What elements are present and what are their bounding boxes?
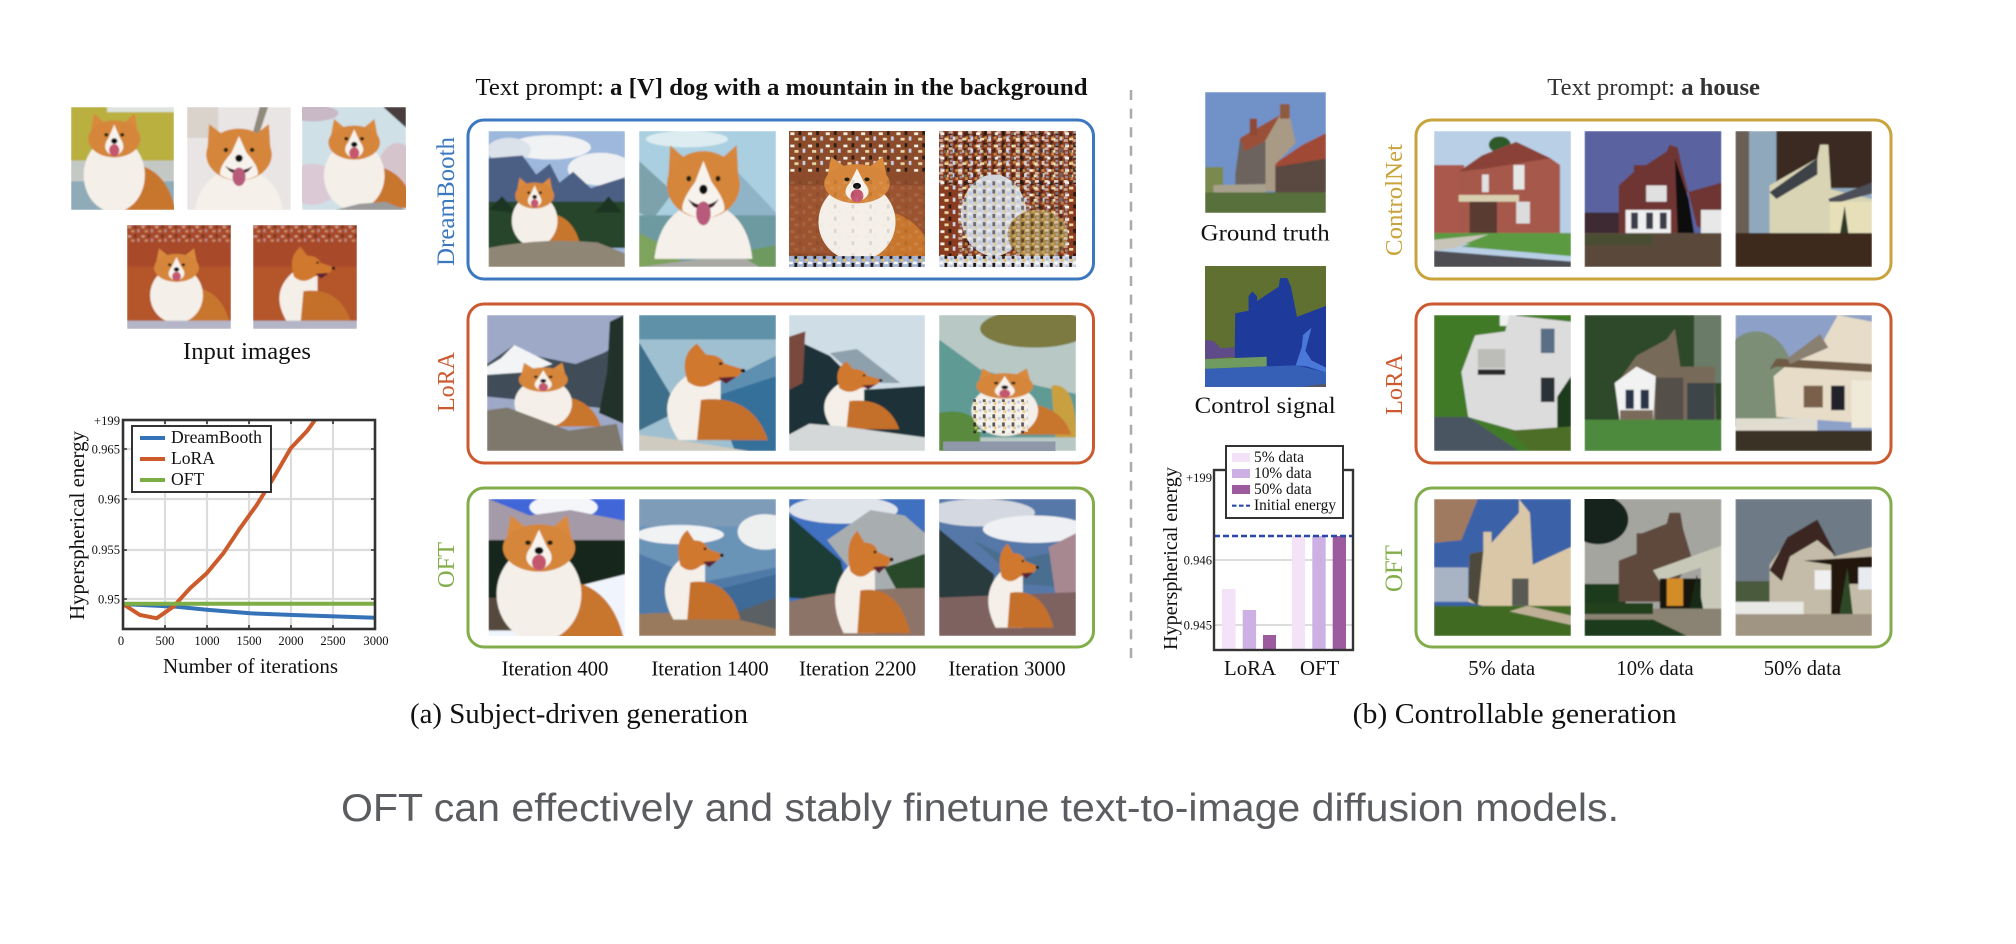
iteration labels: Iteration 3000 xyxy=(948,658,1066,680)
series: OFT xyxy=(123,602,375,606)
bar chart legend xyxy=(1226,446,1343,518)
label: LoRA (dog): LoRA xyxy=(434,351,460,412)
bar chart tick labels: 0.945 xyxy=(1184,618,1212,632)
bar chart legend: 50% data xyxy=(1254,481,1312,498)
dreambooth iteration 2200 xyxy=(789,131,925,267)
data share labels: 10% data xyxy=(1616,658,1694,680)
caption: ground truth: Ground truth xyxy=(1201,221,1330,247)
x axis tick labels: 3000 xyxy=(363,634,389,648)
y axis tick labels: 0.965 xyxy=(92,442,120,456)
lora iteration 1400 xyxy=(639,315,776,451)
x axis tick labels: 0 xyxy=(118,634,124,648)
controlnet 50% xyxy=(1735,131,1872,267)
bar chart legend: 10% data xyxy=(1254,465,1312,482)
oft iteration 2200 xyxy=(789,499,925,636)
label: OFT (dog): OFT xyxy=(433,542,460,588)
data share labels xyxy=(1468,658,1841,680)
iteration labels xyxy=(502,658,1066,680)
vertical dashed divider xyxy=(1130,90,1132,665)
x axis tick labels: 2000 xyxy=(278,634,304,648)
bar chart legend: Initial energy xyxy=(1254,497,1336,514)
iteration labels: Iteration 1400 xyxy=(651,658,769,680)
prompt heading: dog: Text prompt: a [V] dog with a mountain in the background xyxy=(476,74,1088,101)
panel: LoRA row (house) xyxy=(1416,304,1891,463)
lora 10% xyxy=(1584,315,1722,451)
panel: OFT row (house) xyxy=(1416,488,1891,647)
panel: DreamBooth row xyxy=(468,120,1094,279)
series: DreamBooth xyxy=(123,604,375,618)
series: LoRA xyxy=(123,420,315,618)
input image 5 xyxy=(253,225,357,329)
label: OFT (house): OFT xyxy=(1381,545,1408,592)
panel: input images xyxy=(71,105,418,365)
bar chart y axis title: Hyperspherical energy xyxy=(1160,466,1182,650)
oft iteration 3000 xyxy=(939,499,1076,636)
input images caption: Input images xyxy=(183,338,311,365)
input image 2 xyxy=(187,107,291,210)
y axis tick labels: 0.96 xyxy=(98,492,120,506)
x axis tick labels: 500 xyxy=(156,634,174,648)
iteration labels: Iteration 400 xyxy=(502,658,608,680)
oft 5% xyxy=(1434,499,1571,636)
y axis tick labels: 0.955 xyxy=(92,543,120,557)
data share labels: 5% data xyxy=(1468,658,1535,680)
bottom headline: OFT can effectively and stably finetune text-to-image diffusion models. xyxy=(341,787,1619,830)
lora iteration 400 xyxy=(487,315,624,451)
bar chart tick labels: 0.946 xyxy=(1184,554,1212,568)
x axis tick labels: 2500 xyxy=(320,634,346,648)
panel: ControlNet row xyxy=(1416,120,1891,279)
y axis tick labels xyxy=(92,414,120,606)
line chart: hyperspherical energy xyxy=(65,414,389,678)
bar chart tick labels: +199 xyxy=(1186,471,1212,485)
ground truth image xyxy=(1205,92,1326,213)
x axis tick labels: 1500 xyxy=(236,634,262,648)
oft iteration 400 xyxy=(488,499,625,636)
panel: LoRA row (dog) xyxy=(468,304,1094,463)
lora iteration 3000 xyxy=(939,315,1076,451)
oft 10% xyxy=(1584,499,1722,636)
bar chart legend: 5% data xyxy=(1254,449,1304,466)
caption: controllable generation: (b) Controllable generation xyxy=(1353,699,1677,730)
bar chart group labels: OFT xyxy=(1300,657,1340,680)
caption: subject-driven generation: (a) Subject-driven generation xyxy=(410,699,748,730)
prompt heading: house: Text prompt: a house xyxy=(1547,74,1760,101)
controlnet 5% xyxy=(1434,131,1571,267)
dreambooth iteration 3000 xyxy=(939,131,1076,267)
legend xyxy=(132,426,271,492)
oft iteration 1400 xyxy=(639,499,776,636)
y axis tick labels: 0.95 xyxy=(98,592,120,606)
label: ControlNet: ControlNet xyxy=(1381,144,1408,256)
label: DreamBooth: DreamBooth xyxy=(433,137,460,266)
x axis tick labels xyxy=(118,634,389,648)
bar chart group labels xyxy=(1224,657,1340,680)
bars: OFT xyxy=(1292,536,1346,650)
y axis title: Hyperspherical energy xyxy=(65,431,89,620)
input image 1 xyxy=(71,107,174,210)
lora iteration 2200 xyxy=(789,315,925,451)
legend: DreamBooth xyxy=(171,427,262,447)
control signal image xyxy=(1205,266,1326,387)
input image 3 xyxy=(302,107,406,210)
bar chart group labels: LoRA xyxy=(1224,657,1276,680)
panel: OFT row (dog) xyxy=(468,488,1094,647)
input image 4 xyxy=(127,225,231,329)
iteration labels: Iteration 2200 xyxy=(799,658,916,680)
caption: control signal: Control signal xyxy=(1195,393,1336,419)
oft 50% xyxy=(1735,499,1872,636)
x axis tick labels: 1000 xyxy=(194,634,220,648)
x axis title: Number of iterations xyxy=(163,654,338,678)
bar chart: hyperspherical energy by data share xyxy=(1160,446,1353,680)
bar chart tick labels xyxy=(1184,471,1212,632)
label: LoRA (house): LoRA xyxy=(1381,354,1408,415)
controlnet 10% xyxy=(1584,131,1722,267)
lora 5% xyxy=(1434,315,1571,451)
dreambooth iteration 400 xyxy=(488,131,625,267)
y axis tick labels: +199 xyxy=(94,414,120,428)
dreambooth iteration 1400 xyxy=(639,131,776,267)
bars: LoRA xyxy=(1222,589,1276,650)
legend: LoRA xyxy=(171,448,215,468)
legend: OFT xyxy=(171,469,204,489)
lora 50% xyxy=(1735,315,1872,451)
data share labels: 50% data xyxy=(1764,658,1841,680)
